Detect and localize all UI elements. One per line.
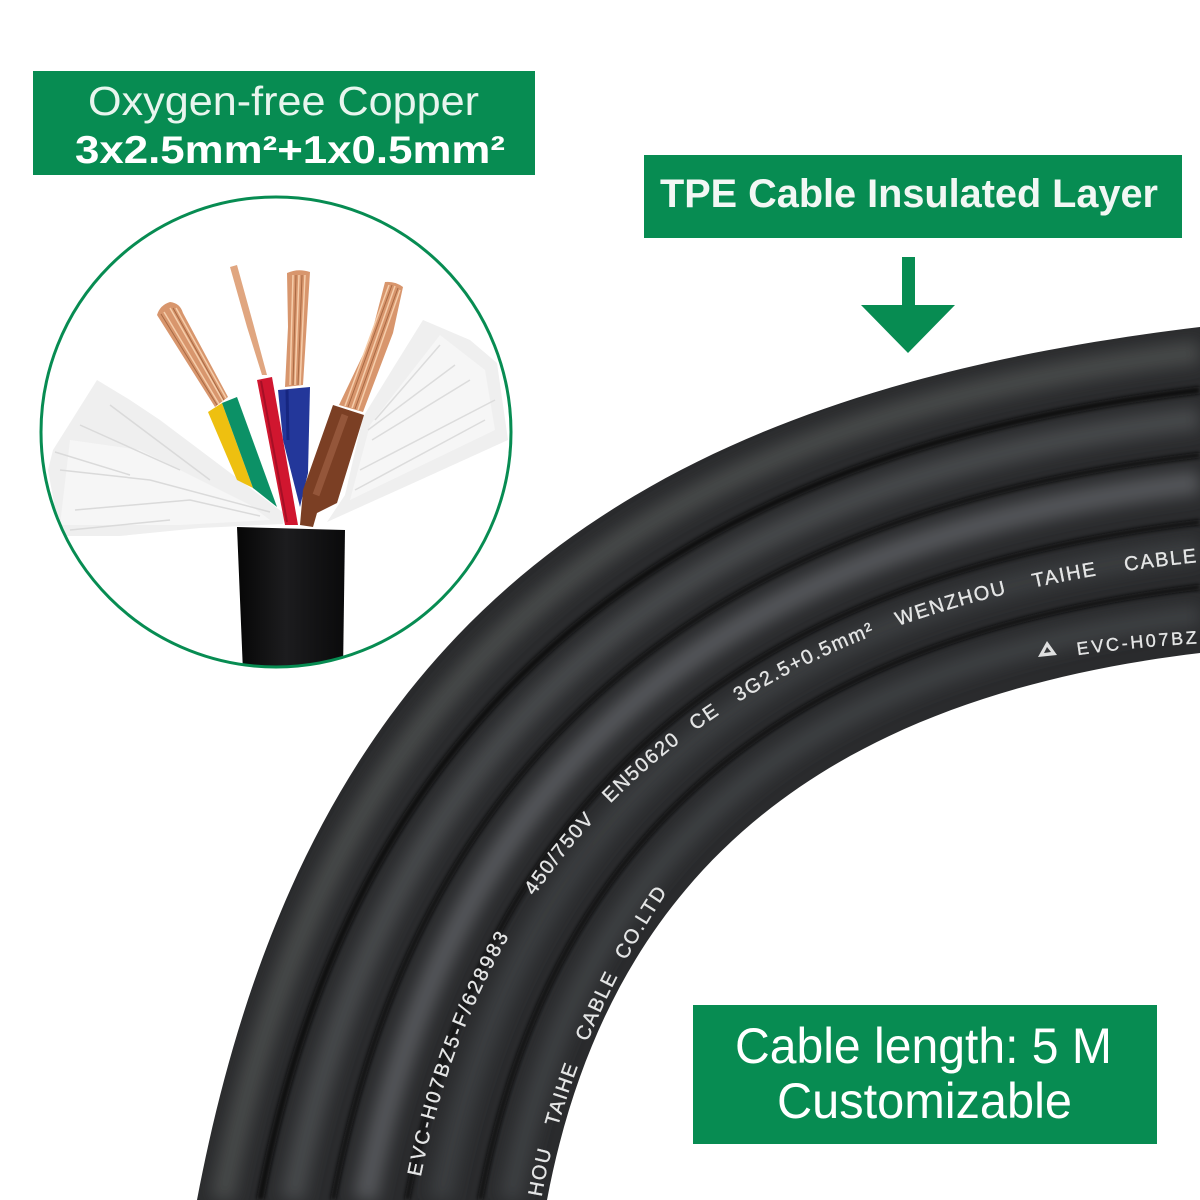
inset contents: [48, 265, 508, 672]
red wire: [257, 377, 298, 525]
gaps between cable turns: [260, 390, 1200, 1200]
arrow pointing to cable: [861, 257, 955, 353]
brown wire: [300, 405, 364, 527]
black cable coil: CABLE: [1124, 548, 1196, 570]
black cable coil: TAIHE: [544, 1062, 578, 1124]
label: TPE insulated layer: TPE Cable Insulated Layer: [660, 172, 1158, 216]
blue wire: [278, 387, 310, 507]
cable body: [197, 327, 1200, 1200]
yellow-green wire: [208, 397, 277, 507]
label: cable length: [693, 1005, 1157, 1144]
icon: warning triangle mark: [1038, 641, 1057, 657]
copper strand: left: [157, 302, 228, 407]
black cable coil: 3G2.5+0.5mm²: [733, 622, 872, 700]
black cable coil: CABLE: [576, 971, 618, 1040]
black cable coil: TAIHE: [1031, 562, 1096, 587]
printed cable marking: long turn: EVC-H07BZ5-F/628983: [407, 932, 508, 1176]
copper strand: thin: [230, 265, 267, 375]
label: oxygen-free copper: 3x2.5mm²+1x0.5mm²: [75, 129, 505, 172]
printed cable marking: inner turn: HOU: [528, 1148, 550, 1196]
circular inset: cable cross-section: [41, 197, 511, 672]
label: cable length: Cable length: 5 M: [735, 1018, 1112, 1074]
label: oxygen-free copper: [33, 71, 535, 175]
black cable coil: WENZHOU: [893, 580, 1004, 625]
black cable coil: CO.LTD: [616, 888, 664, 958]
black cable coil: CE: [690, 703, 719, 728]
copper strand: right: [339, 282, 403, 412]
black cable coil: 450/750V: [526, 810, 591, 894]
black outer sheath: [237, 527, 345, 672]
label: oxygen-free copper: Oxygen-free Copper: [88, 78, 479, 124]
right white filler fan: [327, 320, 508, 522]
black cable coil: EVC-H07BZ: [1077, 631, 1197, 656]
black cable coil: [197, 327, 1200, 1200]
left white filler fan: [48, 380, 285, 536]
green circle outline: [41, 197, 511, 667]
label: cable length: Customizable: [777, 1073, 1072, 1129]
cable surface highlights: [222, 352, 1200, 1200]
label: TPE insulated layer: [644, 155, 1182, 238]
black cable coil: EN50620: [602, 733, 678, 803]
copper strand: middle: [285, 270, 310, 387]
